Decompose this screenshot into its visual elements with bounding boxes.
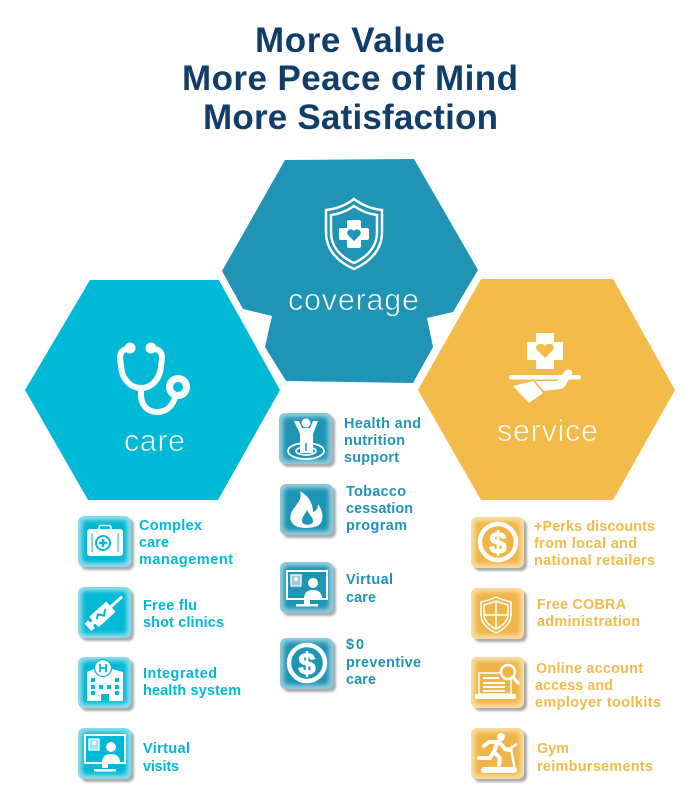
item: health and nutrition support: nutrition (344, 433, 405, 449)
care list (78, 516, 241, 782)
item: gym reimbursements: reimbursements (537, 759, 653, 775)
item: online account access and employer toolkits: access and (535, 678, 613, 694)
item: $0 preventive care (280, 637, 421, 692)
item: +Perks discounts: $ (489, 525, 507, 560)
title: More Peace of Mind (182, 59, 518, 98)
item: +Perks discounts: +Perks discounts (534, 519, 655, 535)
item: virtual care: Virtual (346, 572, 393, 588)
icon: stethoscope (120, 344, 186, 412)
item: virtual visits (78, 728, 190, 782)
item: online account access and employer toolkits: employer toolkits (535, 695, 661, 711)
item: virtual visits: Virtual (143, 741, 190, 757)
item: complex care management: management (139, 552, 233, 568)
item: free COBRA administration: Free COBRA (537, 597, 627, 613)
panel: service hexagon (418, 279, 675, 500)
coverage list (279, 413, 421, 692)
item: tobacco cessation program: Tobacco (346, 484, 406, 500)
item: +Perks discounts (471, 517, 655, 571)
title: More Satisfaction (203, 98, 498, 137)
item: $0 preventive care: preventive (346, 655, 421, 671)
item: complex care management (78, 516, 233, 570)
item: health and nutrition support: Health and (344, 416, 421, 432)
item: virtual care (280, 562, 393, 616)
item: complex care management: care (139, 535, 169, 551)
item: free COBRA administration (471, 588, 640, 642)
icon: hand holding medical cross (509, 333, 581, 403)
title: More Value (255, 21, 445, 60)
item: +Perks discounts: national retailers (534, 553, 655, 569)
item: health and nutrition support: support (344, 450, 399, 466)
label: coverage: coverage (288, 283, 419, 317)
panel: coverage hexagon (222, 159, 478, 383)
item: +Perks discounts: from local and (534, 536, 637, 552)
item: virtual visits: visits (143, 759, 179, 775)
item: free flu shot clinics: shot clinics (143, 615, 224, 631)
item: gym reimbursements: Gym (537, 741, 569, 757)
item: complex care management: Complex (139, 518, 202, 534)
item: free COBRA administration: administration (537, 614, 640, 630)
item: free flu shot clinics: Free flu (143, 598, 197, 614)
service list (471, 517, 661, 782)
panel: care hexagon (25, 280, 280, 500)
item: $0 preventive care: $ (298, 646, 316, 681)
item: integrated health system: health system (143, 683, 241, 699)
item: tobacco cessation program: program (346, 518, 407, 534)
item: tobacco cessation program (280, 484, 413, 538)
item: tobacco cessation program: cessation (346, 501, 413, 517)
label: care: care (124, 424, 185, 458)
item: health and nutrition support (279, 413, 421, 467)
item: online account access and employer toolkits: Online account (536, 661, 643, 677)
item: virtual care: care (346, 590, 376, 606)
item: $0 preventive care: care (346, 672, 376, 688)
item: online account access and employer toolkits (471, 657, 661, 711)
item: gym reimbursements (471, 728, 653, 782)
item: integrated health system: Integrated (143, 666, 217, 682)
item: free flu shot clinics (78, 587, 224, 641)
item: integrated health system (78, 657, 241, 711)
item: $0 preventive care: $0 (346, 637, 364, 653)
icon: shield with heart cross (326, 199, 382, 269)
label: service: service (497, 414, 598, 448)
title (182, 21, 518, 137)
